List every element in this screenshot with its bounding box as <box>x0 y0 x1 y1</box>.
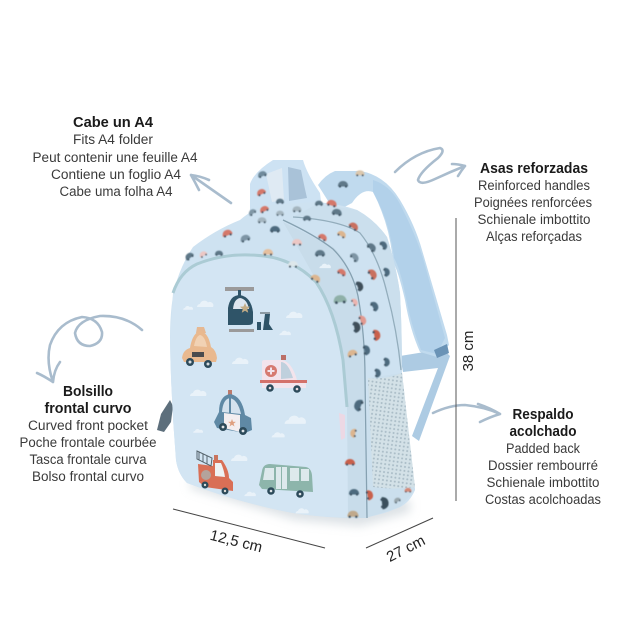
dimension: depth 27 cm: 27 cm <box>384 532 428 566</box>
text block: Cabe un A4: Contiene un foglio A4 <box>51 167 181 182</box>
text block: Respaldo acolchado: Respaldo <box>512 407 574 423</box>
zipper pull on left <box>157 400 173 432</box>
text block: Bolsillo frontal curvo <box>20 384 156 484</box>
text block: Respaldo acolchado: Padded back <box>506 441 580 456</box>
rear side panel <box>293 204 415 518</box>
text block: Respaldo acolchado: acolchado <box>510 424 577 440</box>
helicopter <box>225 287 273 332</box>
text block: Asas reforzadas: Schienale imbottito <box>478 212 590 227</box>
front pocket panel <box>170 255 348 517</box>
taxi <box>182 327 217 368</box>
dimension: width 12,5 cm: 12,5 cm <box>208 527 264 556</box>
text block: Respaldo acolchado: Schienale imbottito <box>486 475 600 490</box>
strap buckle <box>434 344 449 358</box>
arrow: reinforced handles <box>395 148 465 183</box>
backpack side and body <box>170 202 415 518</box>
small vehicle print on top panel and sides <box>184 170 412 518</box>
ambulance <box>260 355 307 393</box>
strap inner padding <box>373 180 445 354</box>
text block: Cabe un A4 <box>32 115 198 199</box>
lower strap <box>400 349 450 441</box>
clouds <box>183 264 331 513</box>
arrow: A4 <box>191 175 231 203</box>
top handle <box>250 160 322 215</box>
text block: Asas reforzadas: Poignées renforcées <box>474 195 592 210</box>
arrow: padded back <box>433 404 500 422</box>
text block: Asas reforzadas <box>474 161 592 244</box>
text block: Respaldo acolchado <box>485 407 601 507</box>
text block: Bolsillo frontal curvo: Poche frontale courbée <box>20 435 156 450</box>
text block: Bolsillo frontal curvo: Bolsillo <box>63 384 113 400</box>
text block: Bolsillo frontal curvo: Tasca frontale curva <box>30 452 147 467</box>
text block: Asas reforzadas: Alças reforçadas <box>486 229 582 244</box>
fire truck <box>197 451 233 494</box>
text block: Cabe un A4: Fits A4 folder <box>73 132 154 147</box>
text block: Respaldo acolchado: Dossier rembourré <box>488 458 598 473</box>
bus <box>259 464 313 498</box>
text block: Bolsillo frontal curvo: Curved front pocket <box>28 418 148 433</box>
text block: Respaldo acolchado: Costas acolchoadas <box>485 492 601 507</box>
text block: Bolsillo frontal curvo: Bolso frontal curvo <box>32 469 144 484</box>
main zipper lines <box>283 220 367 518</box>
text block: Asas reforzadas: Asas reforzadas <box>480 161 588 177</box>
front pocket zipper <box>173 255 347 407</box>
text block: Cabe un A4: Cabe un A4 <box>73 115 153 131</box>
handle inner loops <box>266 168 284 202</box>
mesh side pocket <box>368 373 415 488</box>
shoulder strap <box>318 171 449 357</box>
text block: Asas reforzadas: Reinforced handles <box>478 178 590 193</box>
police car <box>214 390 252 435</box>
dimension: width 12,5 cm <box>173 509 325 556</box>
text block: Cabe un A4: Cabe uma folha A4 <box>60 184 173 199</box>
arrow: curved front pocket <box>37 316 142 382</box>
gusset side panel <box>283 222 366 518</box>
dimension: height 38 cm: 38 cm <box>460 331 477 371</box>
pocket pull tab <box>339 413 345 440</box>
backpack illustration <box>157 160 450 526</box>
text block: Bolsillo frontal curvo: frontal curvo <box>44 401 132 417</box>
text block: Cabe un A4: Peut contenir une feuille A4 <box>32 150 198 165</box>
dimension: depth 27 cm <box>366 518 433 566</box>
ground shadow <box>190 480 410 526</box>
